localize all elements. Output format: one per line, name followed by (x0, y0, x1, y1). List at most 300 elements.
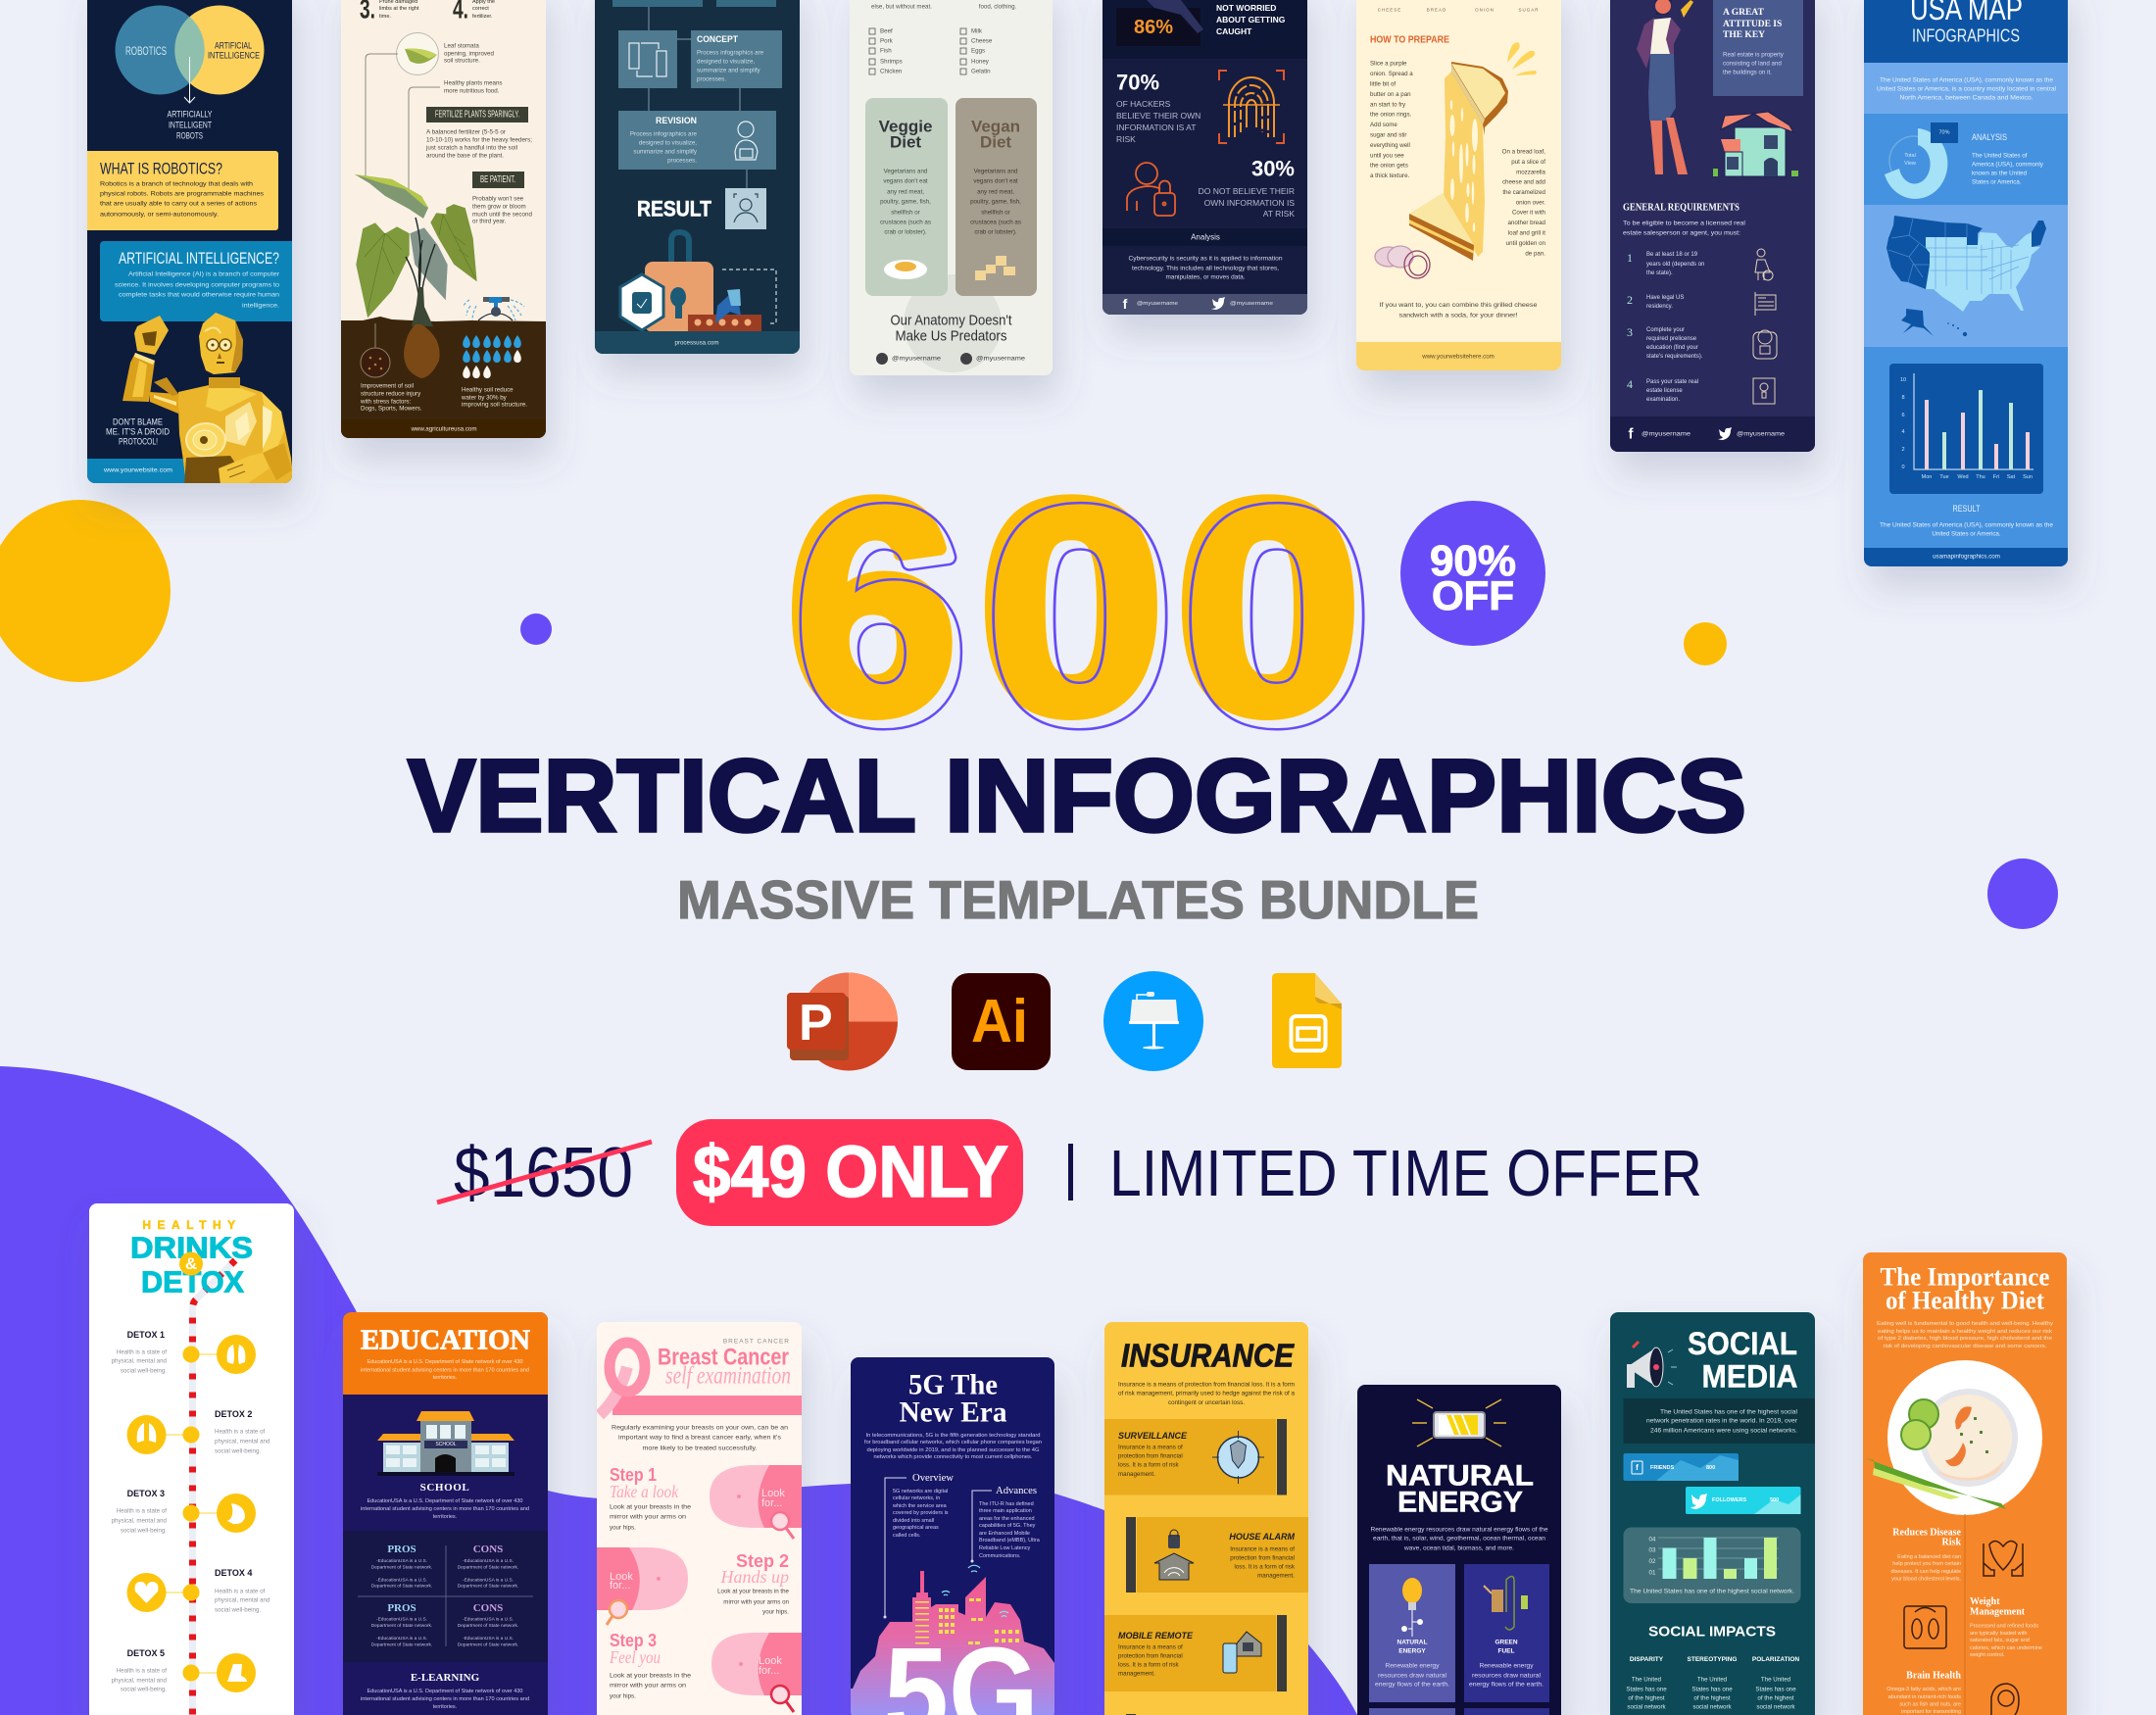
social footer: @myusername (1230, 301, 1273, 307)
donut chart: View (1904, 161, 1916, 167)
intro: estate salesperson or agent, you must: (1623, 229, 1740, 237)
overview column: which the service area (892, 1503, 948, 1509)
purple wave background (0, 1066, 1357, 1715)
closing statement: Make Us Predators (896, 327, 1007, 345)
band: house alarm: Insurance is a means of (1230, 1546, 1295, 1552)
illustration: plant (355, 174, 477, 378)
step 3: your hips. (610, 1693, 636, 1699)
intro text: Regularly examining your breasts on your own, can be an (612, 1425, 789, 1431)
callout: attitude: Real estate is property (1723, 51, 1785, 59)
callout: attitude: the buildings on it. (1723, 69, 1772, 76)
callout: what is robotics: physical robots. Robots are programmable machines (100, 190, 264, 198)
leaf notes: Leaf stomata (444, 43, 479, 49)
droid quote (106, 418, 170, 445)
callout: attitude: THE KEY (1723, 30, 1765, 40)
soil notes: structure reduce injury (361, 390, 421, 398)
pros and cons table: -EducationUSA is a U.S. (376, 1617, 427, 1623)
stat: 70 percent: OF HACKERS (1116, 99, 1171, 109)
band: mobile remote (1104, 1615, 1287, 1691)
impact columns: STEREOTYPING (1688, 1656, 1737, 1663)
title: Breast Cancer (658, 1345, 789, 1370)
tile: natural energy (1369, 1564, 1455, 1702)
benefit: reduces disease: Eating a balanced diet can (1897, 1554, 1961, 1560)
icon: result box (725, 188, 766, 229)
revision box (618, 111, 776, 170)
intro text: of risk management, primarily used to hedge against the risk of a (1118, 1390, 1296, 1397)
bar chart: 4 (1901, 429, 1905, 435)
overview column: geographical areas (893, 1525, 939, 1531)
analysis text: manipulates, or moves data. (1166, 274, 1246, 280)
icon: megaphone (1627, 1342, 1677, 1388)
requirement list: the state). (1646, 270, 1673, 276)
title (900, 1368, 1007, 1429)
social footer: @myusername (1137, 301, 1178, 307)
donut chart: Total (1904, 153, 1916, 159)
leaf notes: opening, improved (444, 51, 494, 57)
top stat band: 86% (1134, 17, 1173, 38)
stat: twitter followers: FOLLOWERS (1712, 1497, 1746, 1503)
title: HEALTHY (142, 1218, 242, 1232)
checklist: Gelatin (971, 69, 991, 74)
checklist (869, 27, 993, 74)
icon: powerpoint: P (799, 995, 833, 1052)
steps 3 and 4: correct (472, 6, 489, 12)
benefit: weight management: calories, which can undermine (1970, 1645, 2042, 1651)
leaf notes (444, 43, 503, 94)
intro text: Eating well is fundamental to good health and well-being. Healthy (1877, 1321, 2053, 1327)
benefit: reduces disease: help protect you from certain (1892, 1561, 1961, 1567)
steps 3 and 4: time. (379, 14, 391, 20)
title: & (185, 1254, 197, 1273)
detox text steps: DETOX 1 (127, 1330, 165, 1340)
pros and cons table (343, 1531, 548, 1662)
band: house alarm: loss. It is a form of risk (1234, 1564, 1296, 1570)
detox text steps: Health is a state of (215, 1429, 266, 1435)
concept box: CONCEPT (697, 34, 738, 44)
detox text steps: Health is a state of (117, 1348, 167, 1356)
band: house alarm: HOUSE ALARM (1229, 1532, 1295, 1542)
requirement list: state's requirements). (1646, 354, 1703, 360)
overview column: 5G networks are digital (893, 1489, 948, 1494)
impact columns: The United (1761, 1676, 1791, 1684)
intro text: more likely to be treated successfully. (643, 1445, 758, 1452)
intro text: risk of developing cardiovascular disease and some cancers. (1884, 1344, 2047, 1349)
panel: robotics infographic (83, 0, 296, 485)
venn result label: INTELLIGENT (169, 120, 212, 131)
step 3: mirror with your arms on (610, 1682, 687, 1690)
analysis text: Cybersecurity is security as it is applied to information (1129, 255, 1283, 263)
intro box: The United States has one of the highest social (1660, 1409, 1797, 1415)
intro text: eating helps us to maintain a healthy weight and reduces our risk (1878, 1329, 2052, 1335)
icon: illustrator: Ai (971, 988, 1028, 1055)
title (1880, 1262, 2050, 1315)
header: international student advising centers in more than 170 countries and (361, 1368, 529, 1374)
title (1688, 1326, 1797, 1394)
pros and cons table: CONS (473, 1544, 503, 1555)
tile: green fuel: energy flows of the earth. (1469, 1682, 1544, 1688)
soil notes: water by 30% by (461, 394, 508, 402)
illustration: golden droid (122, 313, 294, 485)
advances column: Reliable Low Latency (979, 1545, 1031, 1551)
top stat band: NOT WORRIED (1216, 3, 1276, 13)
benefit: weight management: are typically loaded with (1970, 1631, 2027, 1637)
title: The Importance (1880, 1262, 2050, 1292)
ingredient labels: SUGAR (1518, 8, 1540, 12)
intro text: contingent or uncertain loss. (1168, 1399, 1245, 1406)
step 2: Step 2 (736, 1551, 789, 1571)
step 1 (610, 1465, 692, 1531)
badge: 90% off (1400, 501, 1545, 646)
title: INSURANCE (1121, 1337, 1295, 1374)
band: surveillance (1104, 1419, 1287, 1495)
callout: what is robotics: WHAT IS ROBOTICS? (100, 159, 222, 178)
impact columns: social network (1627, 1703, 1667, 1711)
impact columns: social network (1756, 1703, 1796, 1711)
venn diagram (116, 6, 265, 103)
requirement list (1627, 251, 1704, 403)
benefit: brain health: important for transmitting (1901, 1709, 1961, 1715)
method right column: loaf and grill it (1508, 229, 1545, 237)
title: of Healthy Diet (1886, 1286, 2044, 1315)
bar chart: 2 (1901, 447, 1905, 453)
checklist: Beef (880, 27, 893, 35)
intro: To be eligible to become a licensed real (1623, 220, 1745, 227)
title: ENERGY (1397, 1486, 1523, 1519)
old price: $1650 (454, 1134, 633, 1212)
method right column: On a bread loaf, (1502, 149, 1545, 155)
bar chart: 0 (1901, 465, 1905, 470)
step 1: Step 1 (610, 1465, 657, 1485)
method right column (1502, 149, 1546, 257)
school text: territories. (433, 1514, 458, 1520)
overview column: divided into small (893, 1518, 934, 1524)
callout: attitude: consisting of land and (1723, 61, 1782, 67)
impact columns: of the highest (1757, 1695, 1794, 1701)
benefit: weight management: Processed and refined foods (1970, 1623, 2038, 1629)
intro text: Insurance is a means of protection from financial loss. It is a form (1118, 1382, 1295, 1388)
callout: artificial intelligence (100, 241, 296, 321)
divider (1964, 1514, 1966, 1715)
detox text steps: DETOX 4 (215, 1568, 252, 1578)
intro box (1623, 1398, 1815, 1444)
tile: green fuel: GREEN (1494, 1639, 1518, 1646)
social handles (876, 353, 1026, 365)
method right column: put a slice of (1511, 159, 1545, 166)
impact columns: The United (1697, 1676, 1728, 1684)
requirement list: Have legal US (1646, 295, 1684, 301)
closing statement (890, 312, 1012, 345)
header: territories. (433, 1375, 458, 1381)
intro (1623, 220, 1745, 237)
footer band (87, 459, 185, 483)
benefit: weight management (1904, 1596, 2042, 1658)
title band: INFOGRAPHICS (1912, 25, 2020, 45)
pros and cons table: CONS (473, 1602, 503, 1614)
icon: soil sample (361, 323, 390, 377)
soil notes: Improvement of soil (361, 382, 414, 390)
intro band: United States or America, is a country mostly located in central (1877, 86, 2056, 92)
stat: 30 percent (1199, 157, 1295, 219)
callout: artificial intelligence: complete tasks that would otherwise require human (119, 292, 280, 298)
intro text (1118, 1382, 1296, 1406)
requirement list: Pass your state real (1646, 379, 1698, 385)
map band (1864, 205, 2068, 347)
pros and cons table: Department of State network. (371, 1642, 432, 1648)
footer: usamapinfographics.com (1933, 553, 2000, 561)
stat: facebook friends: f (1636, 1463, 1639, 1472)
panel: process infographic (595, 0, 800, 354)
panel: breast cancer infographic (597, 1322, 802, 1715)
leaf detail circle (366, 33, 440, 191)
title: 5G The (908, 1368, 998, 1401)
band: mobile remote: MOBILE REMOTE (1118, 1631, 1194, 1641)
bar chart: Thu (1976, 474, 1985, 480)
step 2: for... (610, 1580, 630, 1592)
social footer (1102, 294, 1307, 315)
e-learning text: territories. (433, 1704, 458, 1710)
stat: facebook friends: FRIENDS (1650, 1465, 1674, 1471)
bar chart: Tue (1939, 474, 1949, 480)
vegan diet panel: crustacea (such as (970, 220, 1021, 225)
detox text steps: social well-being. (121, 1368, 167, 1374)
callout: what is robotics: Robotics is a branch of technology that deals with (100, 180, 254, 188)
method left column: until you see (1370, 153, 1404, 159)
advances column: are Enhanced Mobile (979, 1531, 1030, 1537)
advances column: The ITU-R has defined (979, 1501, 1034, 1507)
venn result label: ARTIFICIALLY (167, 110, 213, 120)
social handles: @myusername (892, 355, 942, 363)
title (658, 1339, 791, 1390)
price button: $49 ONLY (693, 1131, 1008, 1212)
benefit: weight management: Weight (1970, 1596, 2000, 1607)
process icon box (618, 30, 677, 88)
pros and cons table: PROS (387, 1544, 416, 1555)
heading: HOW TO PREPARE (1370, 35, 1449, 45)
revision box: designed to visualize, (639, 139, 697, 147)
impact columns: social network (1692, 1703, 1733, 1711)
callout: artificial intelligence: Artificial Intelligence (AI) is a branch of computer (128, 270, 279, 278)
badge: 90% off: 90% (1430, 537, 1516, 585)
step 1: mirror with your arms on (610, 1513, 687, 1521)
intro band: North America, between Canada and Mexico. (1899, 94, 2034, 102)
veggie diet panel: shellfish or (891, 210, 920, 216)
vegan diet panel: Vegetarians and (974, 169, 1018, 174)
requirement list: 4 (1627, 377, 1633, 391)
decorative purple circle right (1987, 858, 2058, 929)
leaf notes: soil structure. (444, 57, 480, 65)
veggie diet panel: poultry, game, fish, (880, 198, 931, 206)
vegan diet panel: shellfish or (981, 210, 1010, 216)
checklist: Chicken (880, 69, 903, 74)
method left column (1370, 61, 1413, 179)
result text: RESULT (1952, 504, 1981, 514)
illustration: padlock and person (620, 232, 776, 332)
title: DRINKS (130, 1231, 253, 1264)
leaf notes: Healthy plants means (444, 80, 503, 86)
illustration: plate (1865, 1360, 2042, 1515)
intro (1370, 1527, 1548, 1552)
illustration: school: SCHOOL (435, 1442, 457, 1447)
illustration: house (1713, 112, 1798, 176)
intro fragments: else, but without meat. (871, 4, 932, 10)
requirement list: years old (depends on (1646, 262, 1704, 268)
school text (361, 1482, 529, 1520)
soil notes: improving soil structure. (462, 402, 527, 408)
impact columns: DISPARITY (1630, 1656, 1664, 1663)
band: surveillance: management. (1118, 1471, 1155, 1478)
straw (192, 1260, 235, 1715)
intro box: network penetration rates in the world. In 2019, over (1646, 1417, 1797, 1425)
tile: natural energy: energy flows of the earth. (1375, 1682, 1449, 1688)
stat: 70 percent (1116, 71, 1200, 144)
stat: 30 percent: DO NOT BELIEVE THEIR (1199, 186, 1295, 196)
map of USA (1886, 216, 2046, 336)
title: INFOGRAPHICS (945, 739, 1746, 854)
icon: onion rings (1375, 246, 1430, 278)
bar chart: Mon (1922, 474, 1932, 480)
requirement icons (1753, 249, 1777, 404)
intro text: of type 2 diabetes, high blood pressure, high cholesterol and the (1878, 1336, 2052, 1342)
overview column: covered by providers is (893, 1510, 949, 1516)
heading: general requirements: GENERAL REQUIREMENTS (1623, 202, 1740, 214)
intro text: for broadband cellular networks, which cellular phone companies began (864, 1440, 1042, 1446)
detox text steps: physical, mental and (112, 1358, 168, 1364)
tile: natural energy: NATURAL (1397, 1639, 1427, 1646)
veggie diet panel: Vegetarians and (884, 169, 928, 174)
revision box: Process infographics are (630, 131, 698, 137)
method left column: the onion gets (1370, 163, 1408, 169)
method left column: Add some (1370, 122, 1397, 128)
concept box: processes. (697, 76, 726, 82)
tip: fertilize: FERTILIZE PLANTS SPARINGLY. (435, 110, 519, 120)
bar chart: The United States has one of the highest social network. (1630, 1588, 1794, 1595)
result label: RESULT (637, 196, 711, 221)
callout: what is robotics: autonomously, or semi-autonomously. (100, 212, 219, 218)
social footer: f (1629, 425, 1635, 443)
benefit: reduces disease: your blood cholesterol levels. (1891, 1576, 1961, 1582)
soil notes: Dogs, Sports, Mowers. (361, 406, 422, 412)
bar chart: 10 (1900, 377, 1906, 383)
revision box: REVISION (656, 116, 697, 125)
tile: green fuel: FUEL (1498, 1648, 1515, 1654)
tip: be patient (472, 172, 533, 225)
panel: education infographic (343, 1312, 548, 1715)
overview column: called cells. (893, 1533, 921, 1539)
benefit: weight management: saturated fats, sugar and (1970, 1638, 2030, 1643)
decorative yellow circle left (0, 500, 171, 682)
tip: be patient: Probably won't see (472, 196, 524, 202)
pros and cons table: -EducationUSA is a U.S. (376, 1578, 427, 1584)
footer url: www.yourwebsite.com (103, 466, 172, 474)
requirement list: Complete your (1646, 327, 1685, 333)
header (343, 1312, 548, 1395)
tile: natural energy: resources draw natural (1378, 1672, 1446, 1680)
tip: fertilize: A balanced fertilizer (5-5-5 or (426, 129, 506, 135)
bar chart: 04 (1649, 1537, 1656, 1543)
social impacts heading: SOCIAL IMPACTS (1648, 1623, 1776, 1641)
concept box: designed to visualize, (697, 59, 755, 65)
step 2: your hips. (762, 1609, 789, 1615)
ingredient labels: CHEESE (1378, 8, 1401, 12)
panel: real estate infographic (1610, 0, 1815, 452)
icon: person with lock (1127, 163, 1175, 216)
step 1: your hips. (610, 1525, 636, 1531)
decorative purple dot (520, 613, 552, 645)
steps 3 and 4: fertilizer. (472, 14, 493, 20)
analysis text: ANALYSIS (1972, 132, 2007, 142)
title: SOCIAL (1688, 1326, 1797, 1361)
intro text: networks which provide connectivity to most current cellphones. (874, 1454, 1033, 1460)
step 2: Hands up (719, 1567, 789, 1587)
footer (1864, 548, 2068, 566)
detox text steps: Health is a state of (117, 1507, 167, 1515)
requirement list: 3 (1627, 325, 1633, 339)
benefit: reduces disease: Risk (1942, 1537, 1961, 1548)
stat: 70 percent: BELIEVE THEIR OWN (1116, 111, 1200, 121)
veggie diet panel: Diet (890, 133, 921, 151)
donut chart: 70% (1938, 129, 1950, 135)
impact columns (1626, 1656, 1799, 1711)
pros and cons table: -EducationUSA is a U.S. (463, 1636, 514, 1642)
vegan diet panel: Vegan (971, 118, 1020, 135)
result text (1880, 504, 2054, 537)
intro box: 246 million Americans were using social networks. (1650, 1427, 1797, 1435)
tip: be patient: or third year. (472, 218, 507, 225)
bar chart: 8 (1901, 395, 1905, 401)
method right column: de pan. (1525, 251, 1545, 257)
bar chart (1623, 1527, 1801, 1603)
overview column: Overview (912, 1472, 954, 1484)
benefit: reduces disease: Reduces Disease (1892, 1527, 1962, 1539)
benefit: brain health: such as fish and nuts, are (1899, 1701, 1961, 1707)
panel: grilled cheese infographic (1356, 0, 1561, 370)
step 3: for... (759, 1665, 779, 1677)
method left column: the onion rings. (1370, 112, 1412, 119)
e-learning text (361, 1672, 529, 1710)
intro text: important way to find a breast cancer early, when it's (618, 1435, 781, 1441)
panel: 5G infographic (851, 1357, 1054, 1715)
impact columns: States has one (1626, 1686, 1667, 1693)
step 2: Look (610, 1571, 633, 1583)
ingredient labels: BREAD (1427, 8, 1446, 12)
title (1386, 1460, 1534, 1519)
requirement list: examination. (1646, 397, 1680, 403)
benefit: brain health: Brain Health (1906, 1670, 1961, 1682)
donut chart (1885, 122, 1958, 199)
title (408, 739, 1746, 854)
pros and cons table: -EducationUSA is a U.S. (376, 1636, 427, 1642)
step 3: Feel you (609, 1647, 661, 1667)
droid quote: DON'T BLAME (113, 417, 163, 427)
intro band: The United States of America (USA), commonly known as the (1880, 76, 2054, 84)
vegan diet panel (956, 98, 1037, 296)
bar chart: Sun (2023, 474, 2033, 480)
connector lines (649, 7, 747, 188)
benefit: reduces disease (1890, 1527, 2023, 1582)
intro band (1864, 63, 2068, 114)
band: house alarm (1126, 1517, 1308, 1592)
vegan diet panel: vegans don't eat (973, 178, 1018, 184)
pros and cons table: -EducationUSA is a U.S. (463, 1578, 514, 1584)
band: surveillance: protection from financial (1118, 1452, 1183, 1460)
tip: fertilize: just scratch a handful into the soil (425, 145, 517, 151)
panel: insurance infographic (1104, 1322, 1308, 1715)
advances column: Broadband (eMBB), Ultra (979, 1538, 1041, 1544)
analysis text: America (USA), commonly (1972, 161, 2044, 169)
callout: attitude: ATTITUDE IS (1723, 20, 1782, 29)
intro text (612, 1425, 789, 1452)
tip: be patient: much until the second (472, 212, 533, 218)
